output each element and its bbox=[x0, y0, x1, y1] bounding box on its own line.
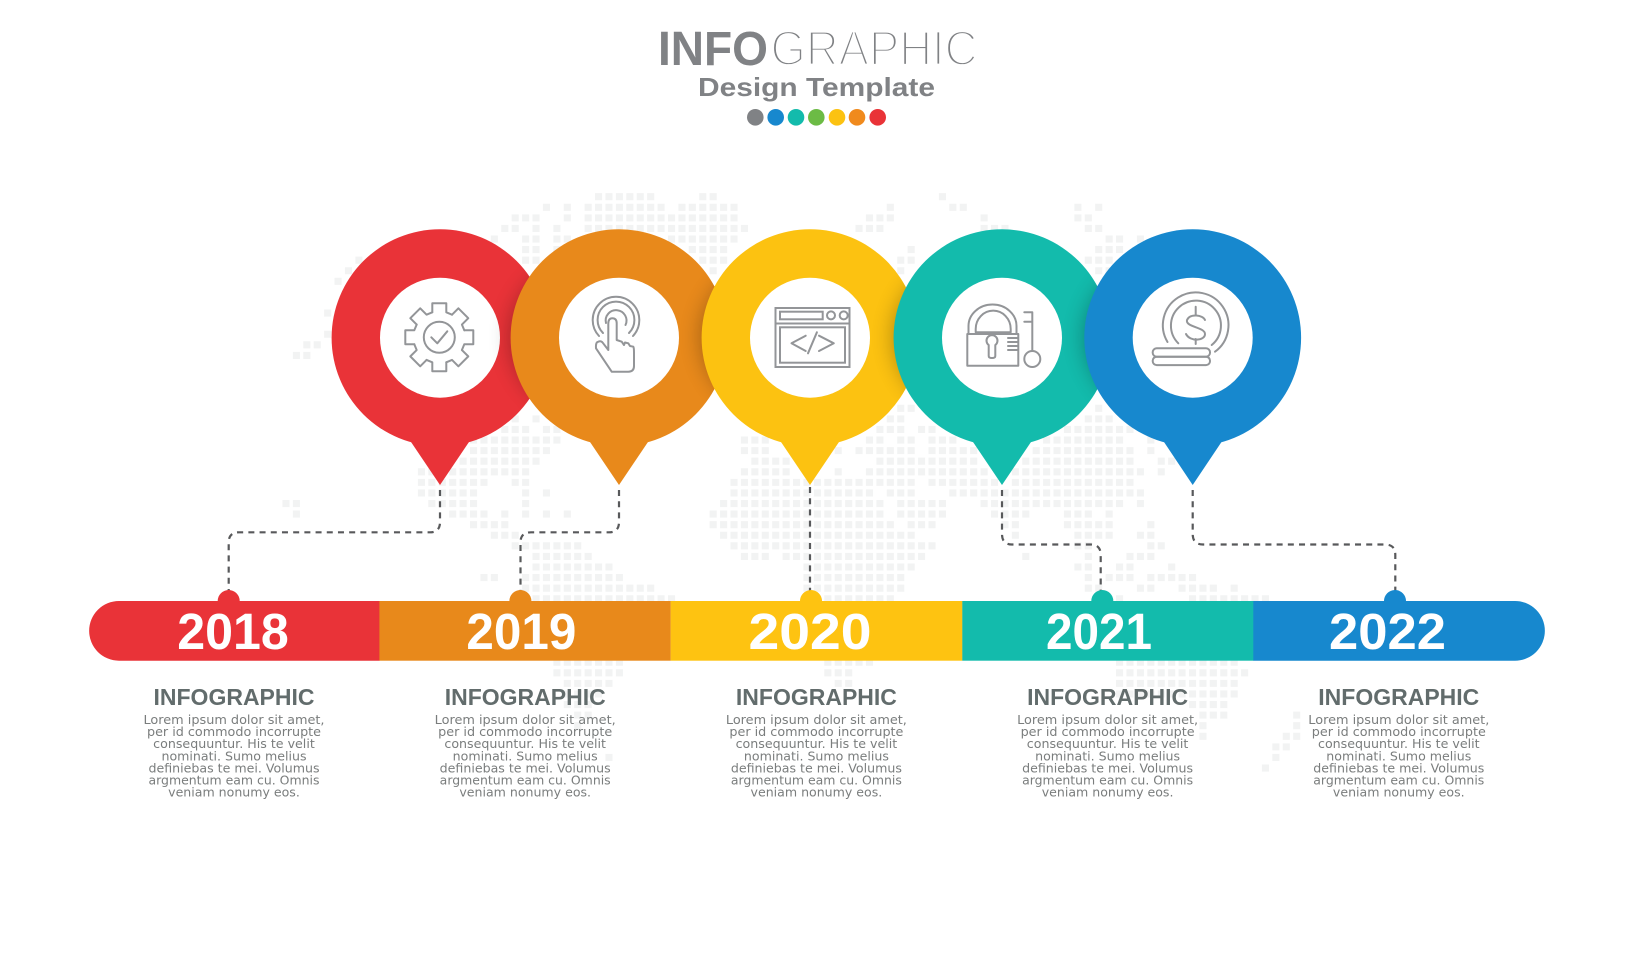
heading: INFOGRAPHIC bbox=[1027, 684, 1188, 710]
icon: gear with check bbox=[405, 303, 473, 371]
body text: definiebas te mei. Volumus bbox=[148, 760, 320, 776]
body text: consequuntur. His te velit bbox=[444, 736, 606, 751]
icon: dollar coin stack bbox=[1153, 292, 1228, 365]
body text: veniam nonumy eos. bbox=[168, 785, 300, 800]
connector: 2021 bbox=[1002, 490, 1101, 592]
body text: definiebas te mei. Volumus bbox=[1313, 760, 1484, 776]
body text: per id commodo incorrupte bbox=[1312, 724, 1486, 739]
body text: Lorem ipsum dolor sit amet, bbox=[1308, 712, 1489, 727]
body text: consequuntur. His te velit bbox=[1027, 736, 1189, 751]
icon: code window bbox=[776, 308, 850, 367]
body text: argmentum eam cu. Omnis bbox=[148, 773, 320, 788]
connector: 2019 bbox=[520, 490, 619, 592]
body text bbox=[435, 712, 616, 800]
body text: Lorem ipsum dolor sit amet, bbox=[726, 712, 907, 727]
body text bbox=[1017, 712, 1198, 800]
body text: nominati. Sumo melius bbox=[744, 748, 889, 763]
body text bbox=[1308, 712, 1489, 800]
pin: teal, lock and key icon bbox=[894, 229, 1098, 485]
body text: veniam nonumy eos. bbox=[751, 785, 882, 800]
icon: padlock and key bbox=[967, 305, 1040, 367]
icon: pointing hand with rings bbox=[593, 297, 639, 372]
segment: 2019: 2019 bbox=[466, 603, 576, 660]
pin: blue, coins icon bbox=[1084, 229, 1301, 485]
body text: nominati. Sumo melius bbox=[1326, 748, 1471, 763]
body text bbox=[726, 712, 907, 800]
connector: 2020 bbox=[809, 487, 811, 592]
segment: 2018 bbox=[89, 590, 380, 661]
body text: per id commodo incorrupte bbox=[1021, 724, 1195, 739]
body text: definiebas te mei. Volumus bbox=[440, 760, 611, 776]
body text: definiebas te mei. Volumus bbox=[731, 760, 902, 776]
body text: argmentum eam cu. Omnis bbox=[731, 773, 902, 788]
text block: column 5 bbox=[1308, 684, 1489, 800]
segment: 2020: 2020 bbox=[748, 603, 872, 660]
pin: orange, touch icon bbox=[510, 229, 714, 485]
body text: Lorem ipsum dolor sit amet, bbox=[1017, 712, 1198, 727]
timeline bar bbox=[89, 590, 1545, 661]
body text: Lorem ipsum dolor sit amet, bbox=[144, 712, 324, 727]
text block: column 2 bbox=[435, 684, 616, 800]
segment: 2021: 2021 bbox=[1046, 603, 1152, 660]
body text: argmentum eam cu. Omnis bbox=[1022, 773, 1193, 788]
body text: definiebas te mei. Volumus bbox=[1022, 760, 1193, 776]
body text: nominati. Sumo melius bbox=[1035, 748, 1180, 763]
body text: veniam nonumy eos. bbox=[1042, 785, 1173, 800]
segment: 2018: 2018 bbox=[177, 603, 289, 660]
body text: per id commodo incorrupte bbox=[147, 724, 321, 739]
body text: argmentum eam cu. Omnis bbox=[440, 773, 611, 788]
body text: argmentum eam cu. Omnis bbox=[1313, 773, 1484, 788]
segment: 2022: 2022 bbox=[1329, 603, 1446, 660]
title: GRAPHIC: GRAPHIC bbox=[770, 22, 978, 76]
subtitle: Design Template bbox=[698, 72, 935, 102]
body text: consequuntur. His te velit bbox=[1318, 736, 1480, 751]
connector: 2022 bbox=[1193, 490, 1395, 592]
body text: nominati. Sumo melius bbox=[162, 748, 306, 763]
body text: per id commodo incorrupte bbox=[729, 724, 903, 739]
segment: 2020 bbox=[671, 590, 962, 661]
body text bbox=[144, 712, 324, 800]
segment: 2019 bbox=[379, 590, 671, 661]
body text: per id commodo incorrupte bbox=[438, 724, 612, 739]
heading: INFOGRAPHIC bbox=[445, 684, 606, 710]
segment: 2022 bbox=[1253, 590, 1545, 661]
colour dots row bbox=[747, 109, 886, 126]
text block: column 1 bbox=[144, 684, 324, 800]
pin: red, gear icon bbox=[332, 229, 530, 485]
body text: veniam nonumy eos. bbox=[1333, 785, 1465, 800]
title: INFO: INFO bbox=[658, 23, 768, 76]
body text: consequuntur. His te velit bbox=[736, 736, 897, 751]
heading: INFOGRAPHIC bbox=[154, 684, 314, 710]
body text: nominati. Sumo melius bbox=[453, 748, 598, 763]
segment: 2021 bbox=[962, 590, 1254, 661]
body text: veniam nonumy eos. bbox=[459, 785, 591, 800]
text block: column 3 bbox=[726, 684, 907, 800]
text block: column 4 bbox=[1017, 684, 1198, 800]
body text: Lorem ipsum dolor sit amet, bbox=[435, 712, 616, 727]
body text: consequuntur. His te velit bbox=[153, 736, 315, 751]
title block bbox=[658, 22, 978, 102]
pin: yellow, code window icon bbox=[702, 229, 906, 485]
heading: INFOGRAPHIC bbox=[1318, 684, 1479, 710]
heading: INFOGRAPHIC bbox=[736, 684, 897, 710]
background: dotted world map bbox=[282, 197, 1304, 768]
connector: 2018 bbox=[229, 490, 440, 592]
